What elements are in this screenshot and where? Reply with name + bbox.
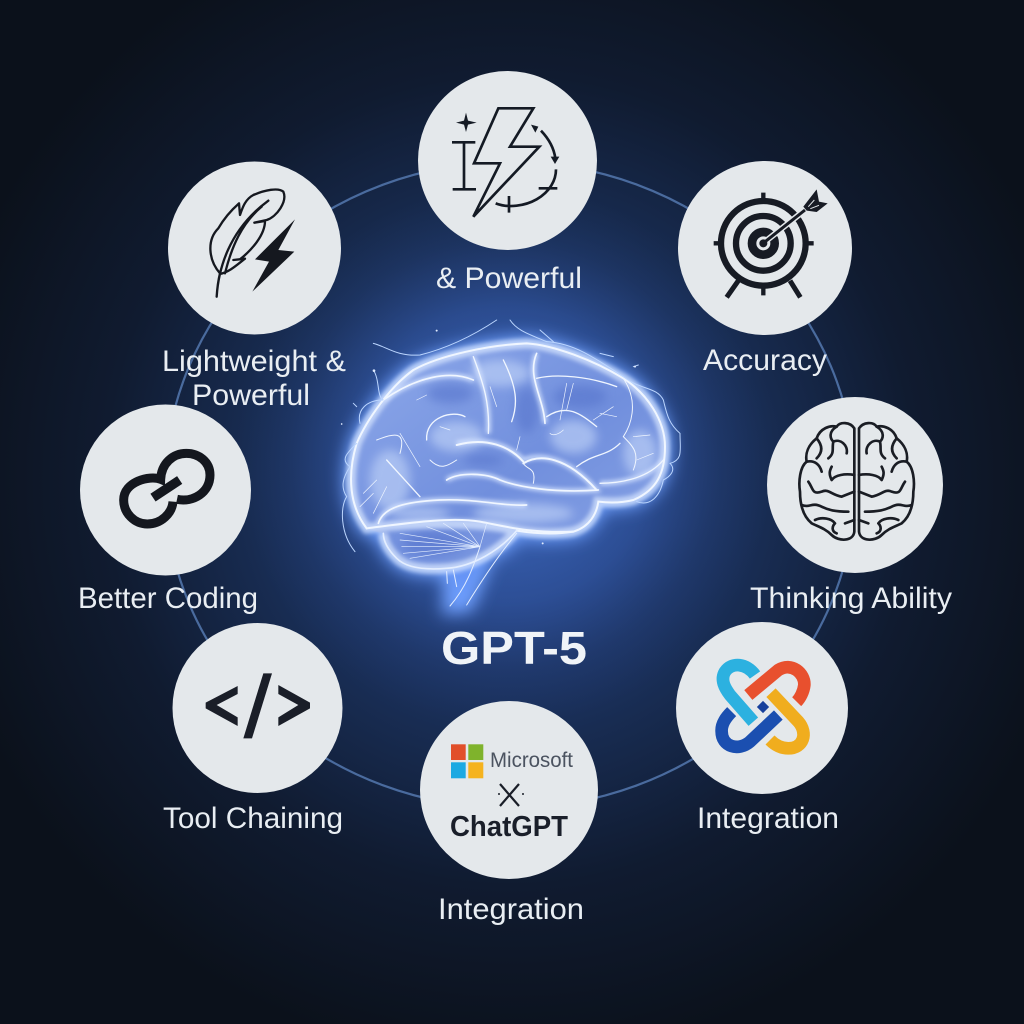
icon: target with arrow	[714, 189, 828, 297]
icon: code brackets	[206, 673, 310, 738]
node: Lightweight & Powerful	[162, 162, 346, 412]
label: Tool Chaining	[163, 802, 343, 835]
label: Lightweight &	[162, 345, 346, 378]
central glowing brain	[341, 320, 680, 607]
label: Thinking Ability	[750, 582, 952, 615]
label line 2: Powerful	[192, 379, 310, 412]
title: GPT-5: GPT-5	[441, 622, 587, 674]
glowing fold lines blurred	[378, 353, 663, 523]
icon: lightning with cursor and cycle	[452, 108, 559, 217]
soft highlight patches	[370, 360, 657, 523]
node disc	[678, 161, 852, 335]
node disc	[676, 622, 848, 794]
cerebellum and stem	[383, 523, 517, 606]
node disc	[172, 623, 342, 793]
connecting ring	[165, 162, 855, 808]
node: Better Coding	[78, 404, 258, 615]
node: Integration (colored links)	[676, 622, 848, 835]
node disc	[168, 162, 341, 334]
node: Integration (Microsoft x ChatGPT)	[420, 701, 598, 926]
icon: Microsoft logo	[451, 744, 483, 778]
label: Integration	[697, 802, 839, 835]
node disc	[418, 71, 597, 250]
cross mark	[498, 784, 524, 806]
label: Accuracy	[703, 344, 827, 377]
node disc	[420, 701, 598, 879]
brain halo	[351, 343, 665, 607]
node: Thinking Ability	[750, 397, 952, 615]
node: Tool Chaining	[163, 623, 343, 835]
ChatGPT wordmark: ChatGPT	[450, 811, 568, 843]
icon: chain link	[124, 453, 210, 524]
crisp fold lines	[351, 343, 665, 534]
sparks	[341, 330, 636, 544]
electric tendrils	[342, 320, 680, 552]
central brain glow	[235, 185, 775, 725]
label: Integration	[438, 893, 584, 926]
label: Better Coding	[78, 582, 258, 615]
icon: interlocking colored links	[722, 665, 804, 748]
brain body	[351, 343, 665, 569]
feather	[210, 189, 284, 297]
node: & Powerful	[418, 71, 597, 295]
darker fold shading	[403, 383, 607, 555]
icon: brain top view	[799, 423, 914, 540]
label: & Powerful	[436, 262, 582, 295]
wide inner edge glow	[351, 343, 665, 569]
icon: feather and bolt	[210, 189, 295, 297]
node disc	[767, 397, 943, 573]
Microsoft wordmark: Microsoft	[490, 749, 573, 772]
node: Accuracy	[678, 161, 852, 377]
bolt	[252, 219, 295, 292]
node disc	[80, 404, 251, 576]
